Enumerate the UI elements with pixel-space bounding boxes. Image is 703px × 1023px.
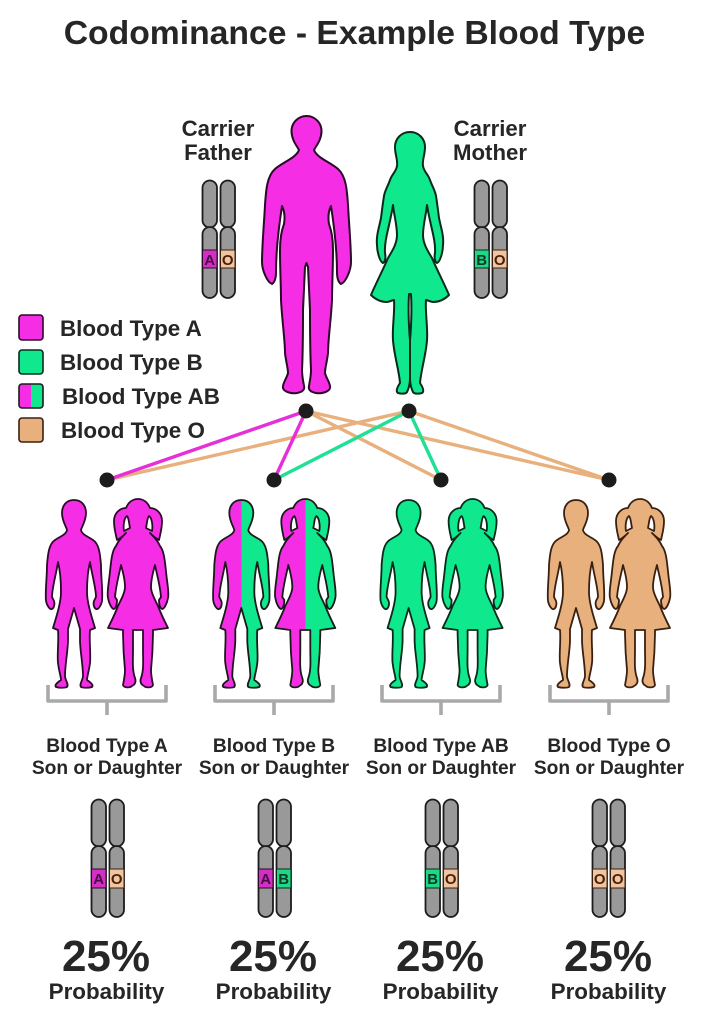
column: type A children: 25% — [62, 932, 150, 981]
column: type AB children, labelled Blood Type B: A — [260, 871, 271, 888]
column: type A children: Son or Daughter — [32, 758, 183, 779]
column: type B children, labelled Blood Type AB — [366, 499, 517, 1004]
column: type AB children, labelled Blood Type B: B — [278, 871, 289, 888]
column: type B children, labelled Blood Type AB: O — [445, 871, 457, 888]
column: type O children — [534, 499, 685, 1004]
column: type O children: 25% — [564, 932, 652, 981]
column: type B children, labelled Blood Type AB: Blood Type AB — [373, 736, 509, 757]
title: Codominance - Example Blood Type — [64, 14, 645, 52]
chromosomes: father A O — [202, 180, 235, 298]
chromosomes: mother B O: B — [476, 252, 487, 269]
label: carrier mother: Carrier — [454, 116, 527, 141]
column: type AB children, labelled Blood Type B — [199, 499, 350, 1004]
legend: Blood Type B — [60, 350, 203, 375]
column: type O children: Blood Type O — [547, 736, 671, 757]
column: type AB children, labelled Blood Type B: Blood Type B — [213, 736, 335, 757]
legend: Blood Type AB — [62, 384, 220, 409]
column: type B children, labelled Blood Type AB: Probability — [383, 979, 499, 1004]
label: carrier father: Carrier — [182, 116, 255, 141]
column: type A children: O — [111, 871, 123, 888]
column: type AB children, labelled Blood Type B: Son or Daughter — [199, 758, 350, 779]
legend — [19, 315, 220, 443]
column: type AB children, labelled Blood Type B: Probability — [216, 979, 332, 1004]
inheritance lines — [107, 411, 609, 480]
column: type A children: Blood Type A — [46, 736, 168, 757]
label: carrier mother: Mother — [453, 140, 527, 165]
column: type B children, labelled Blood Type AB: 25% — [396, 932, 484, 981]
figure: father — [262, 116, 351, 393]
column: type B children, labelled Blood Type AB: B — [427, 871, 438, 888]
column: type A children: Probability — [49, 979, 165, 1004]
chromosomes: father A O: A — [204, 252, 215, 269]
chromosomes: mother B O: O — [494, 252, 506, 269]
column: type A children — [32, 499, 183, 1004]
column: type O children: Probability — [551, 979, 667, 1004]
legend: Blood Type A — [60, 316, 202, 341]
legend: Blood Type O — [61, 418, 205, 443]
chromosomes: father A O: O — [222, 252, 234, 269]
label: carrier father: Father — [184, 140, 252, 165]
column: type A children: A — [93, 871, 104, 888]
figure: mother — [371, 132, 449, 394]
column: type B children, labelled Blood Type AB: Son or Daughter — [366, 758, 517, 779]
column: type AB children, labelled Blood Type B: 25% — [229, 932, 317, 981]
chromosomes: mother B O — [474, 180, 507, 298]
column: type O children: O — [594, 871, 606, 888]
junction dots — [100, 404, 616, 488]
column: type O children: Son or Daughter — [534, 758, 685, 779]
column: type O children: O — [612, 871, 624, 888]
